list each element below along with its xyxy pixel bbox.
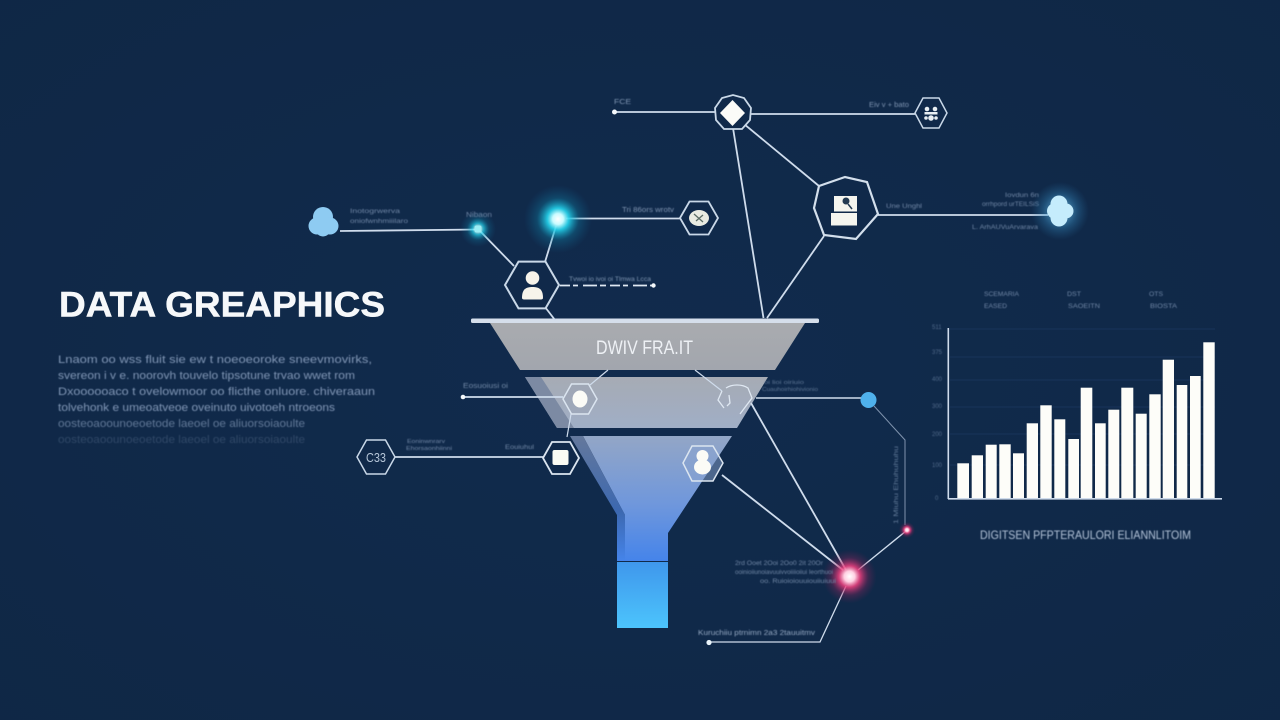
label: left cloud	[350, 208, 408, 225]
small pink node	[899, 522, 915, 538]
labels: lower left line	[406, 439, 535, 452]
hex icon: network chip	[680, 202, 718, 234]
label: hex node right of cyan glow: Tri 86ors wrotv	[622, 207, 675, 214]
labels: lower left line: Eouiuhul	[505, 444, 535, 451]
text block: intro paragraph: oosteoaoounoeoetode laeoel oe aliuorsoiaoulte	[58, 434, 305, 446]
chart caption: DIGITSEN PFPTERAULORI ELIANNLITOIM	[980, 528, 1191, 542]
funnel label: DWIV FRA.IT	[596, 338, 693, 359]
labels: pink node: 2rd Ooet 2Ooi 2Oo0 2it 20Or	[735, 561, 823, 567]
chart y axis labels: 300	[932, 404, 943, 410]
label: funnel hex 2	[762, 380, 818, 393]
text block: intro paragraph: Lnaom oo wss fluit sie ew t noeoeoroke sneevmovirks,	[58, 354, 372, 366]
chart bars	[957, 342, 1215, 499]
funnel top rim	[471, 318, 819, 323]
text block: intro paragraph: oosteoaoounoeoetode laeoel oe aliuorsoiaoulte	[58, 418, 305, 430]
end dot: funnel hex 1 line	[461, 395, 465, 399]
text block: intro paragraph: tolvehonk e umeoatveoe oveinuto uivotoeh ntroeons	[58, 402, 336, 414]
vertical label along right connector: 1 Miuhu Ehuhuhuhu	[893, 445, 900, 524]
top-left end dot and label: FCE	[614, 99, 631, 106]
text block: intro paragraph: Dxoooooaco t ovelowmoor oo flicthe onluore. chiveraaun	[58, 386, 375, 398]
labels: right cloud line: Une Unghl	[886, 203, 923, 210]
bottom label and end dot: Kuruchiiu ptrnimn 2a3 2tauuitmv	[698, 630, 816, 637]
labels: pink node: ooinioiiunoiavuuivvoiiiioiiui Ieorthuoi	[735, 570, 833, 576]
chart legend labels: DST	[1067, 291, 1081, 298]
chart legend labels	[984, 291, 1178, 310]
chart y axis labels: 0	[935, 496, 939, 502]
funnel	[471, 318, 819, 628]
label: left cloud: Inotogrwerva	[350, 208, 401, 215]
large cyan glow node	[524, 185, 592, 253]
title: DATA GREAPHICS	[59, 286, 385, 324]
dashed connector and label	[560, 276, 656, 288]
node: funnel hex 1	[563, 384, 597, 414]
text block: intro paragraph	[58, 354, 375, 446]
chart y axis labels	[932, 325, 943, 502]
label: funnel hex 2: oi lioi oiriuio	[764, 380, 804, 386]
dashed connector and label: Tvwoi io ivoi oi Tlmwa Lcca	[569, 276, 651, 283]
connector lines	[340, 112, 1048, 642]
chart legend labels: SCEMARIA	[984, 291, 1020, 298]
chart y axis labels: 100	[932, 463, 943, 469]
chart axes	[948, 328, 1222, 499]
labels: lower left line: Ehorsaonhiinni	[406, 446, 452, 452]
chart legend labels: OTS	[1149, 291, 1164, 298]
hex icon: diamond	[715, 95, 751, 129]
chart y axis labels: 375	[932, 350, 943, 356]
labels: right cloud line	[886, 192, 1040, 231]
label: top right hex: Eiv v + bato	[869, 102, 909, 109]
label: funnel hex 2: Cuauhoirhiohivionio	[762, 387, 818, 393]
labels: right cloud line: Iovdun 6n	[1005, 192, 1039, 199]
chart y axis labels: 200	[932, 432, 943, 438]
large pink glow node	[822, 550, 876, 604]
hex icon: grid nodes	[915, 98, 947, 128]
hex icon: left CSS	[357, 440, 395, 474]
chart legend labels: SAOEITN	[1068, 303, 1100, 310]
funnel section 2	[525, 377, 768, 428]
chart legend labels: BIOSTA	[1150, 303, 1178, 310]
hex icon: square	[543, 442, 579, 474]
hex icon: person	[505, 262, 559, 308]
labels: lower left line: Eoninwnrarv	[407, 439, 445, 445]
icon: left cloud	[308, 207, 338, 236]
small cyan glow node	[460, 211, 496, 247]
icon: glowing right cloud	[1031, 182, 1089, 240]
label: small cyan node: Nibaon	[466, 212, 492, 219]
label: funnel hex 1: Eosuoiusi oi	[463, 383, 509, 390]
chart y axis labels: 400	[932, 377, 943, 383]
blue dot node	[860, 392, 876, 408]
labels: pink node	[735, 561, 836, 585]
hex icon: funnel person	[683, 446, 723, 481]
chart y axis labels: 511	[932, 325, 942, 331]
node: funnel hex 2	[718, 385, 752, 414]
funnel section 1	[490, 323, 805, 370]
bar chart	[932, 291, 1222, 542]
labels: right cloud line: orrhpord urTEILSiS	[982, 201, 1040, 208]
labels: pink node: oo. Ruioioiouuiouiiuiuui	[760, 579, 836, 585]
large hex icon: monitor	[814, 177, 878, 239]
text block: intro paragraph: svereon i v e. noorovh touvelo tipsotune trvao wwet rom	[58, 370, 355, 382]
chart legend labels: EASED	[984, 303, 1007, 310]
funnel section 3	[570, 436, 732, 561]
labels: right cloud line: L. ArhAUVuArvarava	[972, 224, 1038, 231]
top-left end dot and label	[612, 99, 631, 114]
hex icon: left CSS: C33	[366, 450, 386, 465]
funnel neck	[617, 562, 668, 628]
label: left cloud: oniofwnhmiiilaro	[350, 218, 408, 225]
bottom label and end dot	[698, 630, 816, 645]
